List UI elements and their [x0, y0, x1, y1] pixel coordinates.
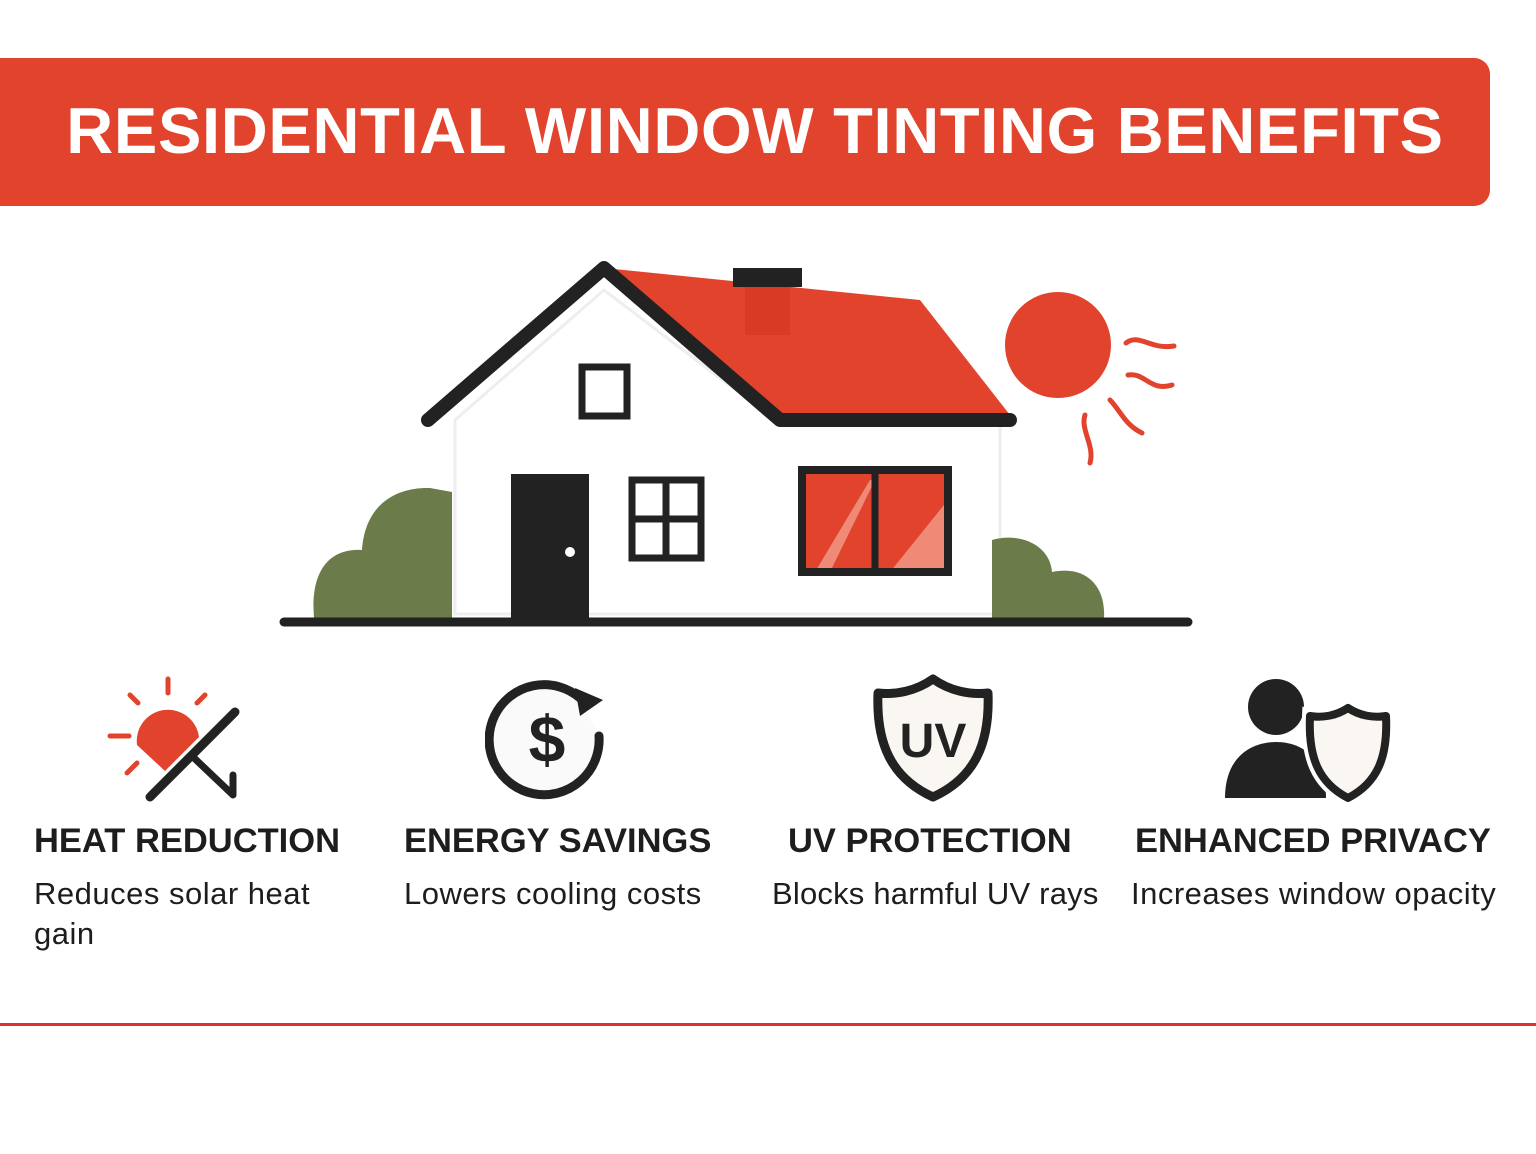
small attic window — [582, 367, 627, 416]
ground line — [284, 618, 1188, 626]
benefit: energy savings: Lowers cooling costs — [404, 876, 702, 911]
icon: privacy — [1225, 679, 1390, 802]
benefit: energy savings — [404, 822, 711, 911]
benefit: heat reduction: HEAT REDUCTION — [34, 822, 340, 860]
icon: energy savings — [485, 680, 604, 800]
door — [511, 474, 589, 620]
benefit: UV protection — [772, 822, 1099, 911]
bushes — [313, 488, 1104, 618]
chimney — [733, 268, 802, 335]
benefit: enhanced privacy — [1131, 822, 1496, 911]
wall — [455, 290, 1000, 614]
benefit: enhanced privacy: Increases window opacity — [1131, 876, 1496, 911]
house illustration — [280, 261, 1192, 626]
roof — [428, 268, 1010, 420]
benefit: heat reduction: Reduces solar heat gain — [34, 876, 310, 951]
sun — [1005, 292, 1174, 463]
title banner — [0, 58, 1490, 206]
benefit: heat reduction — [34, 822, 340, 951]
tinted window — [802, 470, 948, 572]
four-pane window — [632, 480, 701, 558]
icon: UV shield — [873, 674, 993, 802]
benefit: energy savings: ENERGY SAVINGS — [404, 822, 711, 860]
title banner: RESIDENTIAL WINDOW TINTING BENEFITS — [66, 94, 1444, 167]
benefit: UV protection: UV PROTECTION — [788, 822, 1072, 860]
benefit: enhanced privacy: ENHANCED PRIVACY — [1135, 822, 1491, 860]
icon: UV shield: UV — [900, 715, 966, 768]
icon: energy savings: $ — [529, 702, 565, 776]
benefit: UV protection: Blocks harmful UV rays — [772, 876, 1099, 911]
icon: heat reduction — [108, 676, 240, 802]
